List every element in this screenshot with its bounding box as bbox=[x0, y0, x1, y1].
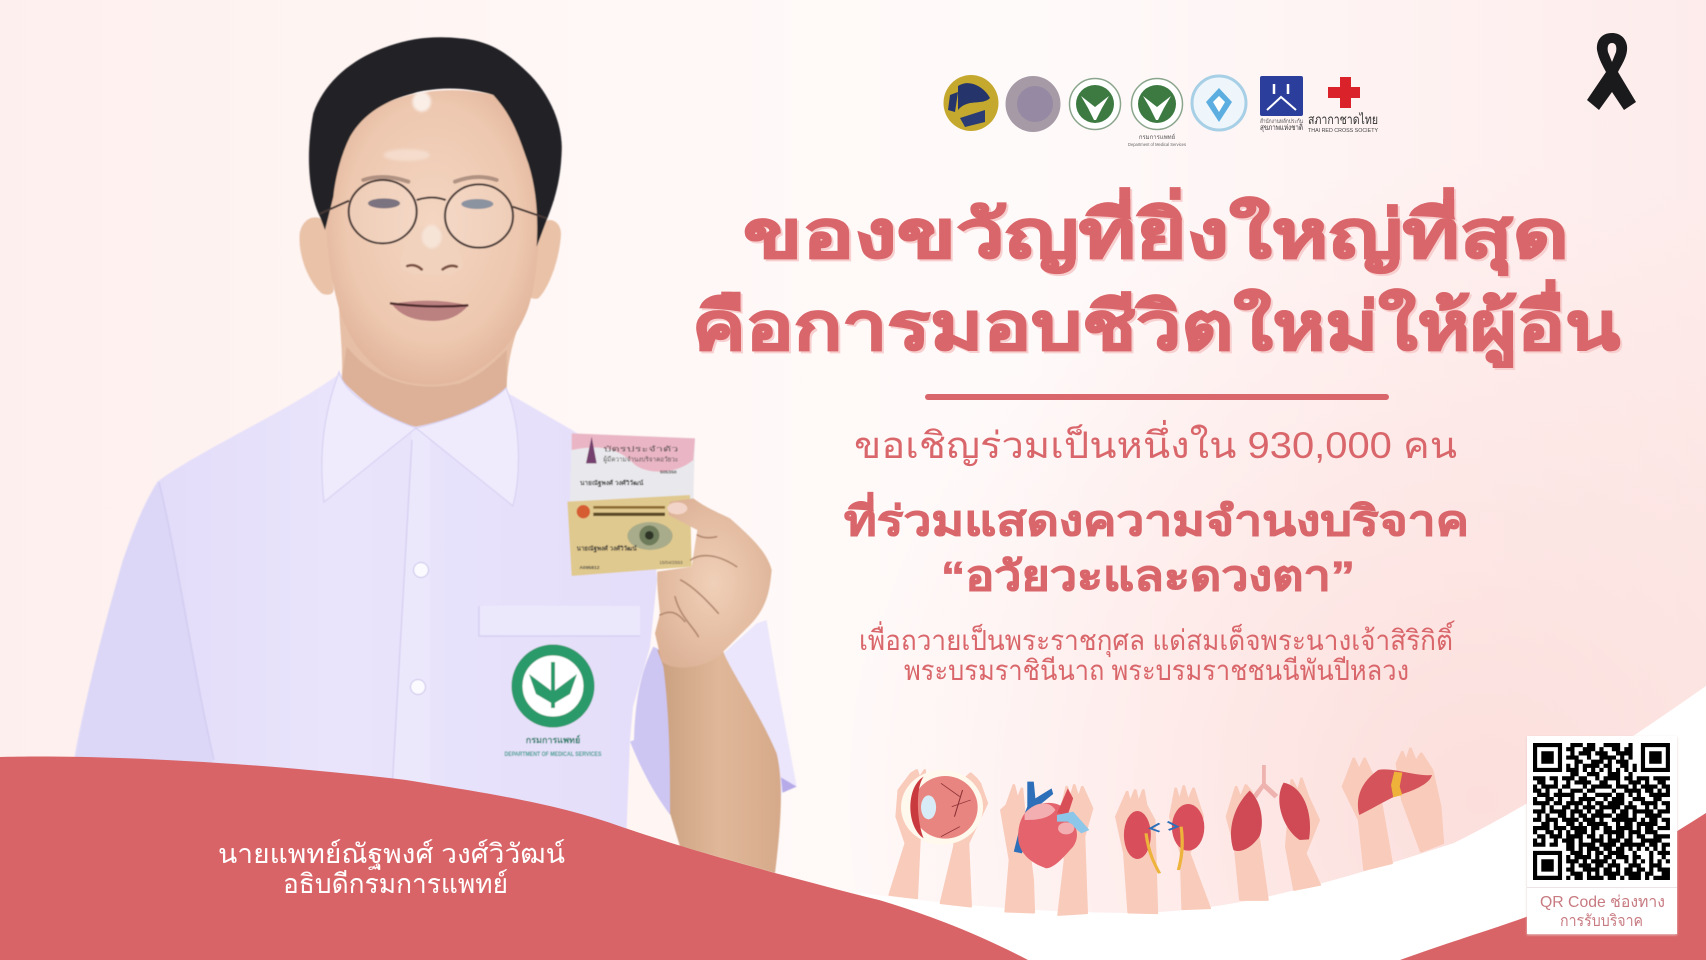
QR caption bbox=[1540, 894, 1665, 930]
gold eye card: นายณัฐพงศ์ วงศ์วิวัฒน์ bbox=[577, 545, 637, 554]
neck bbox=[338, 297, 525, 427]
title: ของขวัญที่ยิ่งใหญ่ที่สุด bbox=[743, 187, 1569, 276]
logo row bbox=[944, 75, 1379, 147]
white donor card: 505350 bbox=[660, 469, 677, 475]
hands holding kidneys bbox=[1116, 786, 1210, 913]
donation heading: “อวัยวะและดวงตา” bbox=[941, 553, 1355, 599]
white donor card: บัตรประจำตัว bbox=[603, 445, 678, 454]
ministry badge: DEPARTMENT OF MEDICAL SERVICES bbox=[504, 751, 602, 758]
shirt buttons bbox=[410, 562, 428, 694]
dedication text: เพื่อถวายเป็นพระราชกุศล แด่สมเด็จพระนางเจ้าสิริกิติ์ bbox=[859, 620, 1455, 658]
QR caption: QR Code ช่องทาง bbox=[1540, 894, 1665, 911]
white donor card: นายณัฐพงศ์ วงศ์วิวัฒน์ bbox=[580, 479, 644, 488]
logo: thai red cross: THAI RED CROSS SOCIETY bbox=[1308, 128, 1379, 134]
title bbox=[692, 187, 1620, 368]
red wave: bottom left bbox=[0, 756, 1028, 960]
doctor name caption bbox=[218, 838, 565, 899]
icon: black mourning ribbon bbox=[1587, 33, 1636, 110]
organ illustrations in hands bbox=[890, 748, 1443, 915]
hands holding heart bbox=[1001, 785, 1092, 915]
forehead shine bbox=[383, 92, 431, 161]
thumb nail and finger creases bbox=[660, 502, 737, 637]
red wave: bottom right bbox=[1400, 813, 1706, 960]
icon: liver bbox=[1358, 769, 1432, 815]
logo: national health blue square bbox=[1260, 76, 1303, 132]
ministry badge bbox=[504, 650, 602, 758]
white donor card: ผู้มีความจำนงบริจาคอวัยวะ bbox=[603, 455, 678, 463]
logo: yellow seal bbox=[944, 75, 998, 131]
invitation text: ขอเชิญร่วมเป็นหนึ่งใน 930,000 คน bbox=[854, 419, 1457, 467]
doctor name caption: นายแพทย์ณัฐพงศ์ วงศ์วิวัฒน์ bbox=[218, 838, 565, 870]
logo: department of medical services: กรมการแพทย์ bbox=[1139, 133, 1175, 141]
white curved band bbox=[860, 686, 1706, 960]
logo: national health blue square: สำนักงานหลักประกัน bbox=[1260, 118, 1303, 125]
glasses bbox=[319, 180, 547, 248]
hand bbox=[655, 498, 772, 668]
QR code bbox=[1533, 743, 1670, 880]
eyebrows bbox=[363, 177, 497, 182]
logo: department of medical services bbox=[1128, 78, 1187, 147]
logo: national health blue square: สุขภาพแห่งชาติ bbox=[1260, 123, 1303, 132]
nose bbox=[400, 225, 463, 275]
QR code panel bbox=[1527, 736, 1677, 934]
doctor name caption: อธิบดีกรมการแพทย์ bbox=[283, 868, 508, 899]
gold eye card: A095812 bbox=[579, 565, 600, 571]
eyes bbox=[368, 198, 493, 209]
QR caption: การรับบริจาค bbox=[1560, 913, 1643, 930]
gold eye card: 15/04/2553 bbox=[659, 560, 683, 565]
hair bbox=[309, 37, 562, 247]
shirt body bbox=[70, 374, 657, 850]
logo: ministry of public health bbox=[1070, 78, 1120, 130]
hands holding eye bbox=[890, 770, 987, 907]
icon: heart bbox=[1014, 782, 1089, 868]
face bbox=[326, 90, 539, 385]
title: คือการมอบชีวิตใหม่ให้ผู้อื่น bbox=[692, 279, 1620, 368]
head bbox=[299, 37, 562, 385]
logo: department of medical services: Department of Medical Services bbox=[1128, 142, 1187, 147]
gold eye card bbox=[567, 495, 692, 576]
logo: blue circle bbox=[1192, 76, 1246, 130]
logo: thai red cross: สภากาชาดไทย bbox=[1308, 112, 1378, 127]
dedication text bbox=[859, 620, 1455, 686]
ears bbox=[299, 217, 561, 299]
forearm and hand bbox=[655, 498, 781, 873]
collar bbox=[322, 372, 518, 506]
donor cards bbox=[567, 433, 695, 576]
forearm bbox=[657, 650, 781, 873]
logo: thai red cross bbox=[1308, 77, 1379, 134]
icon: lungs bbox=[1231, 765, 1310, 851]
hands holding liver bbox=[1343, 748, 1443, 870]
white donor card bbox=[570, 433, 695, 505]
photo: doctor holding donor cards bbox=[70, 37, 797, 873]
ministry badge: กรมการแพทย์ bbox=[526, 734, 580, 745]
dedication text: พระบรมราชินีนาถ พระบรมราชชนนีพันปีหลวง bbox=[904, 655, 1409, 686]
sleeve and gap around forearm bbox=[627, 620, 797, 870]
hands holding lungs bbox=[1227, 778, 1320, 900]
donation heading: ที่ร่วมแสดงความจำนงบริจาค bbox=[844, 492, 1469, 544]
donation heading bbox=[844, 492, 1469, 599]
divider bbox=[925, 394, 1389, 400]
icon: eye bbox=[901, 770, 983, 845]
icon: kidneys bbox=[1124, 804, 1204, 873]
mouth bbox=[390, 301, 468, 321]
logo: purple seal bbox=[1006, 76, 1060, 132]
